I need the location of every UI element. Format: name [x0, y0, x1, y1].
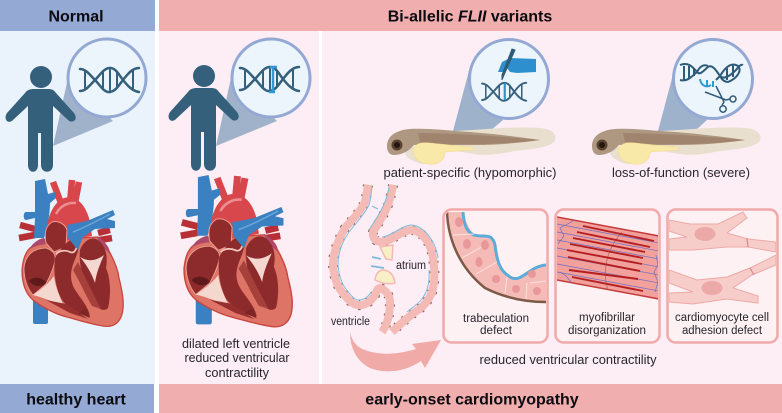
- illustration: zebrafish loss-of-function: [592, 127, 760, 164]
- heading: Normal: [0, 0, 155, 31]
- panel: adhesion defect: adhesion defect: [682, 325, 763, 337]
- panel: adhesion defect: [668, 210, 778, 342]
- panel: myofibrillar disorganization: disorganization: [568, 325, 646, 337]
- icon: broken DNA: [680, 64, 743, 82]
- micrograph: cardiomyocytes: [669, 212, 776, 304]
- text: dilated left ventricle: contractility: [205, 366, 270, 380]
- label: ventricle: ventricle: [331, 316, 370, 328]
- footer: healthy heart: healthy heart: [26, 392, 126, 408]
- icon: person patient: [169, 65, 239, 171]
- text: dilated left ventricle: reduced ventricular: [184, 351, 290, 365]
- label: loss-of-function: loss-of-function (severe): [612, 166, 750, 180]
- panel: myofibrillar disorganization: myofibrillar: [579, 312, 635, 324]
- divider: [319, 31, 322, 384]
- panel: trabeculation defect: [444, 210, 548, 342]
- callout: patient DNA with variant: [216, 39, 310, 146]
- illustration: dilated heart: [181, 175, 292, 327]
- panel: adhesion defect: cardiomyocyte cell: [675, 312, 769, 324]
- arrow: to detail panels: [350, 332, 441, 371]
- label: reduced ventricular contractility: reduced ventricular contractility: [480, 353, 657, 367]
- illustration: healthy heart: [19, 179, 123, 326]
- valve: lower: [375, 270, 395, 284]
- icon: person normal: [6, 66, 76, 172]
- panel: myofibrillar disorganization: [556, 210, 660, 342]
- footer: early-onset cardiomyopathy: [159, 384, 782, 413]
- heading: Bi-allelic FLII variants: Bi-allelic FLII variants: [388, 8, 552, 26]
- valve: upper: [380, 245, 393, 260]
- callout: normal DNA: [53, 39, 146, 146]
- label: patient-specific: patient-specific (hypomorphic): [384, 166, 556, 180]
- icon: scissors: [705, 86, 736, 112]
- illustration: zebrafish patient-specific: [387, 127, 555, 164]
- micrograph: myofibril band: [557, 217, 659, 299]
- panel: trabeculation defect: trabeculation: [463, 313, 529, 325]
- label: atrium: atrium: [396, 260, 426, 272]
- text: dilated left ventricle: [182, 337, 290, 380]
- panel: trabeculation defect: defect: [480, 325, 513, 337]
- micrograph: cell layer: [447, 212, 546, 302]
- footer: early-onset cardiomyopathy: early-onset cardiomyopathy: [365, 392, 579, 408]
- panel: normal background: [0, 31, 155, 384]
- illustration: zebrafish heart section: [333, 185, 438, 332]
- panel: bi-allelic background: [159, 31, 782, 384]
- callout: loss of function scissors: [658, 40, 752, 131]
- callout: patient-specific base editing: [453, 40, 548, 131]
- footer: healthy heart: [0, 384, 154, 413]
- heading: Normal: Normal: [48, 8, 104, 26]
- icon: hand writing: [498, 49, 536, 80]
- heading: Bi-allelic FLII variants: [159, 0, 782, 31]
- text: dilated left ventricle: dilated left ventricle: [182, 337, 290, 351]
